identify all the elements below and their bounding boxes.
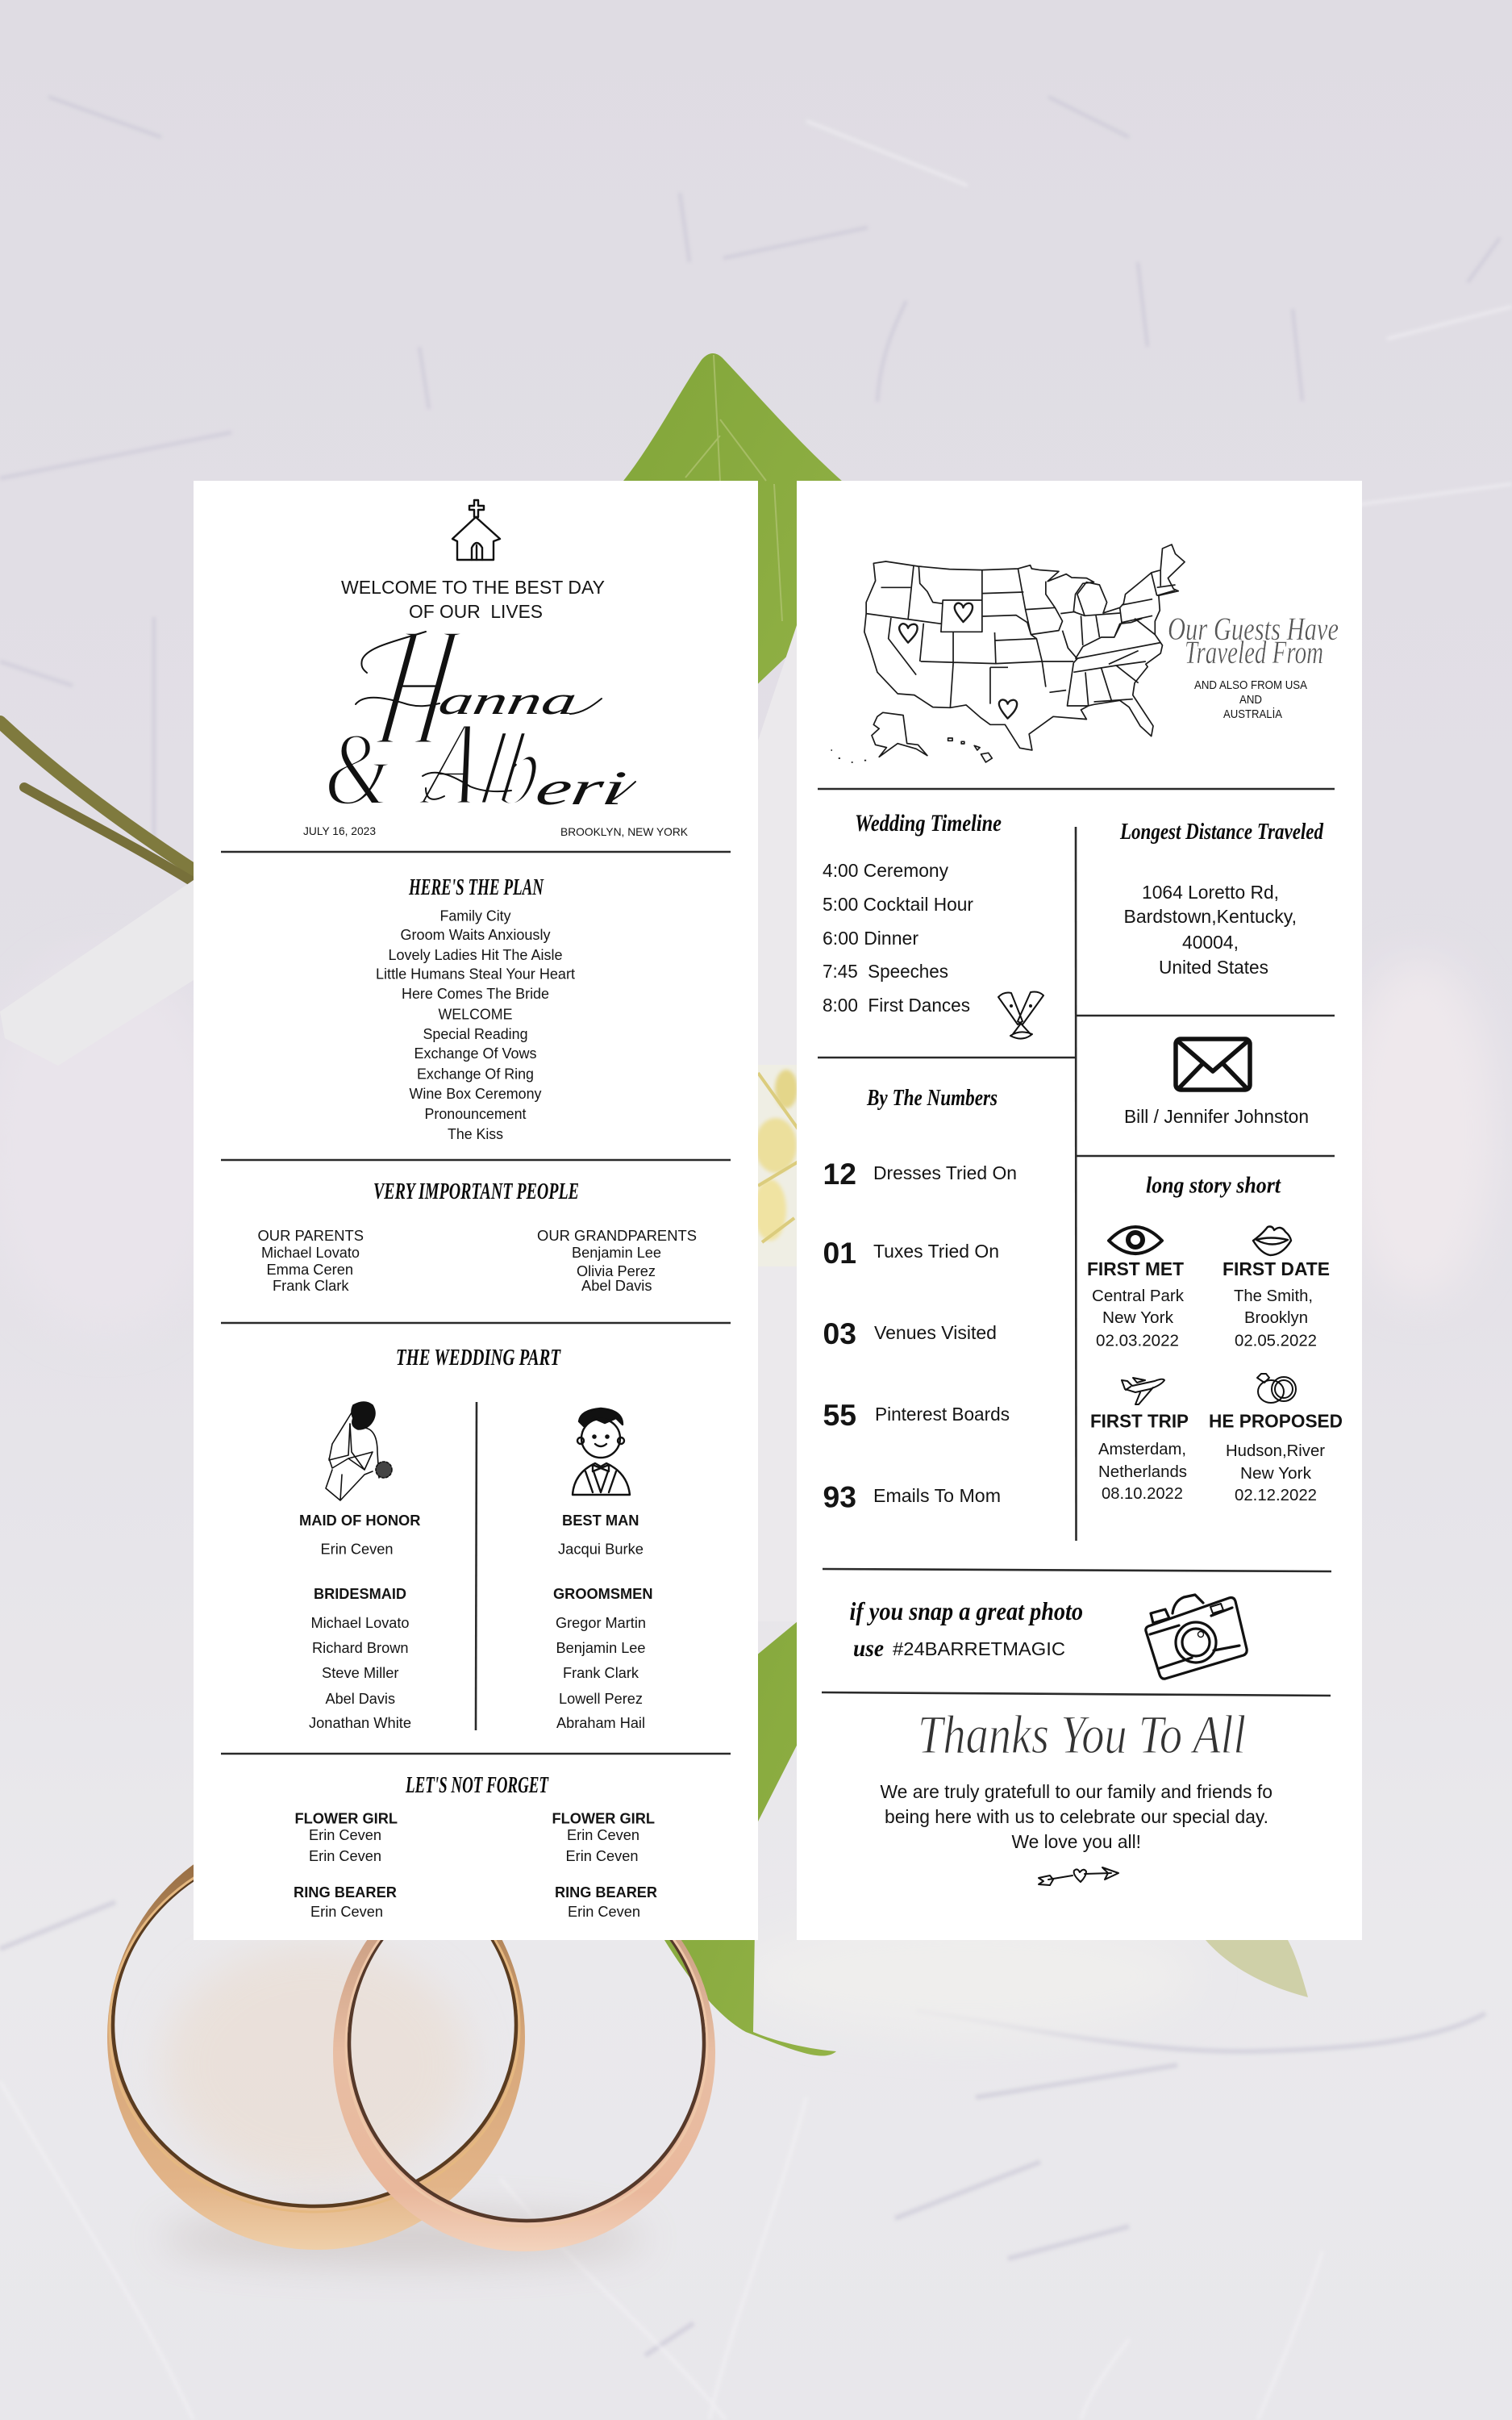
ring bearer right: Erin Ceven bbox=[568, 1904, 640, 1920]
welcome text: OF OUR LIVES bbox=[409, 601, 543, 622]
pale petal left bbox=[0, 960, 226, 1331]
couple names: lb bbox=[473, 711, 550, 828]
our parents: Frank Clark bbox=[273, 1278, 350, 1294]
stems bbox=[0, 722, 202, 887]
icon: champagne glasses bbox=[998, 992, 1043, 1039]
icon: envelope bbox=[1176, 1039, 1250, 1090]
first date: FIRST DATE bbox=[1223, 1258, 1330, 1279]
maid of honor bbox=[299, 1512, 421, 1557]
ring: left gold bbox=[107, 1824, 525, 2250]
first trip: 08.10.2022 bbox=[1102, 1485, 1183, 1503]
best man bbox=[558, 1512, 644, 1557]
flower girl left: Erin Ceven bbox=[309, 1848, 381, 1864]
maid of honor: MAID OF HONOR bbox=[299, 1512, 421, 1529]
stat: tuxes bbox=[823, 1237, 999, 1270]
first met: 02.03.2022 bbox=[1096, 1333, 1179, 1350]
best man: Jacqui Burke bbox=[558, 1541, 644, 1557]
he proposed: New York bbox=[1240, 1465, 1312, 1483]
first met: FIRST MET bbox=[1087, 1258, 1184, 1279]
ceremony order list bbox=[376, 908, 575, 1142]
best man: BEST MAN bbox=[562, 1512, 639, 1529]
stat: dresses bbox=[823, 1158, 1017, 1191]
ceremony order list: Family City bbox=[440, 908, 511, 924]
first date: 02.05.2022 bbox=[1235, 1333, 1317, 1350]
flower girl right: Erin Ceven bbox=[566, 1848, 639, 1864]
ring shadows bbox=[161, 2214, 645, 2263]
our grandparents: Abel Davis bbox=[581, 1278, 652, 1294]
he proposed: HE PROPOSED bbox=[1209, 1410, 1343, 1431]
heading: wedding timeline: Wedding Timeline bbox=[855, 810, 1002, 837]
ring bearer left: RING BEARER bbox=[294, 1884, 397, 1901]
heading: by the numbers: By The Numbers bbox=[866, 1086, 998, 1111]
our grandparents: OUR GRANDPARENTS bbox=[537, 1228, 697, 1244]
icon: heart arrow bbox=[1039, 1867, 1118, 1885]
stat: emails: Emails To Mom bbox=[873, 1485, 1001, 1506]
stat: pinterest: 55 bbox=[823, 1399, 856, 1432]
ceremony order list: Here Comes The Bride bbox=[402, 986, 549, 1002]
stat: emails bbox=[823, 1481, 1001, 1513]
welcome text: WELCOME TO THE BEST DAY bbox=[341, 577, 605, 598]
our parents bbox=[258, 1228, 364, 1294]
timeline list: 6:00 Dinner bbox=[823, 928, 918, 949]
stat: tuxes: Tuxes Tried On bbox=[873, 1241, 999, 1262]
groomsmen: Gregor Martin bbox=[556, 1615, 646, 1631]
flower girl left: FLOWER GIRL bbox=[295, 1810, 398, 1826]
icon: groom bbox=[573, 1408, 630, 1495]
flower stamens bbox=[754, 1065, 798, 1266]
icon: airplane bbox=[1122, 1378, 1164, 1404]
bridesmaids: Michael Lovato bbox=[311, 1615, 410, 1631]
couple names: H bbox=[366, 590, 469, 782]
groomsmen: GROOMSMEN bbox=[553, 1586, 653, 1602]
panel: right wedding details bbox=[797, 481, 1362, 1940]
also from text: AND bbox=[1239, 693, 1262, 707]
flower girl right bbox=[552, 1810, 655, 1864]
address: 1064 Loretto Rd, bbox=[1142, 882, 1279, 903]
ceremony order list: WELCOME bbox=[439, 1007, 513, 1023]
ribbon bbox=[0, 880, 194, 1066]
groomsmen: Abraham Hail bbox=[556, 1715, 645, 1731]
timeline list: 8:00 First Dances bbox=[823, 995, 970, 1016]
thank you message: We are truly gratefull to our family and friends fo bbox=[881, 1781, 1272, 1802]
couple names: A bbox=[416, 697, 492, 831]
ceremony order list: Little Humans Steal Your Heart bbox=[376, 966, 575, 983]
heading: here's the plan: HERE'S THE PLAN bbox=[408, 875, 544, 900]
address: United States bbox=[1159, 957, 1268, 978]
bridesmaids: Steve Miller bbox=[322, 1665, 398, 1681]
couple names bbox=[324, 590, 641, 831]
heading: longest distance traveled: Longest Distance Traveled bbox=[1119, 819, 1323, 845]
bridesmaids: Abel Davis bbox=[326, 1691, 395, 1707]
ceremony order list: Wine Box Ceremony bbox=[410, 1086, 542, 1102]
ceremony order list: Exchange Of Ring bbox=[417, 1066, 534, 1083]
ring bearer left: Erin Ceven bbox=[310, 1904, 383, 1920]
stat: dresses: 12 bbox=[823, 1158, 856, 1191]
icon: camera bbox=[1146, 1595, 1247, 1679]
ceremony order list: Special Reading bbox=[423, 1026, 527, 1042]
our grandparents bbox=[537, 1228, 697, 1294]
he proposed bbox=[1209, 1410, 1343, 1504]
photo hashtag text: #24BARRETMAGIC bbox=[893, 1638, 1065, 1659]
timeline list: 7:45 Speeches bbox=[823, 961, 948, 982]
also from text: AUSTRALİA bbox=[1223, 707, 1282, 721]
lower leaf bbox=[657, 1617, 836, 2056]
date and place: JULY 16, 2023 bbox=[303, 824, 376, 837]
groomsmen: Lowell Perez bbox=[559, 1691, 643, 1707]
script: our guests have traveled from bbox=[1168, 611, 1339, 670]
map: USA with hearts bbox=[831, 544, 1185, 762]
welcome text bbox=[341, 577, 605, 622]
ring bearer right bbox=[555, 1884, 657, 1920]
stat: tuxes: 01 bbox=[823, 1237, 856, 1270]
date and place: BROOKLYN, NEW YORK bbox=[560, 825, 689, 838]
our grandparents: Olivia Perez bbox=[577, 1263, 656, 1279]
first date bbox=[1223, 1258, 1330, 1350]
script: our guests have traveled from: Traveled From bbox=[1185, 634, 1323, 670]
bridesmaids: Jonathan White bbox=[309, 1715, 411, 1731]
first met: Central Park bbox=[1092, 1287, 1185, 1305]
first met: New York bbox=[1102, 1309, 1174, 1327]
first date: The Smith, bbox=[1234, 1287, 1313, 1305]
flower girl right: Erin Ceven bbox=[567, 1827, 639, 1843]
groomsmen: Frank Clark bbox=[563, 1665, 639, 1681]
stat: dresses: Dresses Tried On bbox=[873, 1162, 1017, 1183]
photo hashtag text bbox=[850, 1596, 1083, 1662]
flower girl left: Erin Ceven bbox=[309, 1827, 381, 1843]
flower girl left bbox=[295, 1810, 398, 1864]
timeline list: 5:00 Cocktail Hour bbox=[823, 894, 973, 915]
couple names: eri bbox=[532, 761, 630, 816]
ceremony order list: Pronouncement bbox=[424, 1106, 526, 1122]
ring bearer left bbox=[294, 1884, 397, 1920]
our parents: OUR PARENTS bbox=[258, 1228, 364, 1244]
ceremony order list: Groom Waits Anxiously bbox=[400, 927, 550, 943]
bud bbox=[1206, 1940, 1308, 1997]
stat: venues bbox=[823, 1317, 997, 1350]
name flourishes bbox=[356, 632, 635, 803]
photo hashtag text: if you snap a great photo bbox=[850, 1596, 1083, 1625]
our parents: Michael Lovato bbox=[261, 1245, 360, 1261]
first trip: Netherlands bbox=[1098, 1463, 1187, 1481]
top leaf bbox=[621, 353, 855, 807]
mail name: Bill / Jennifer Johnston bbox=[1124, 1106, 1309, 1127]
heading: let's not forget: LET'S NOT FORGET bbox=[405, 1773, 549, 1798]
ring: right rose bbox=[333, 1855, 715, 2251]
also from text: AND ALSO FROM USA bbox=[1194, 678, 1307, 692]
flower girl right: FLOWER GIRL bbox=[552, 1810, 655, 1826]
photo hashtag text: use bbox=[853, 1635, 884, 1662]
icon: lips bbox=[1253, 1226, 1291, 1255]
heading: long story short: long story short bbox=[1146, 1173, 1281, 1199]
address: 40004, bbox=[1182, 932, 1239, 953]
thank you message bbox=[881, 1781, 1272, 1852]
stat: pinterest bbox=[823, 1399, 1010, 1432]
ceremony order list: Lovely Ladies Hit The Aisle bbox=[389, 947, 563, 963]
address: Bardstown,Kentucky, bbox=[1124, 906, 1297, 927]
bridesmaids bbox=[309, 1586, 411, 1731]
script: our guests have traveled from: Our Guests Have bbox=[1168, 611, 1339, 647]
bridesmaids: Richard Brown bbox=[312, 1640, 408, 1656]
groomsmen bbox=[553, 1586, 653, 1731]
couple names: anna bbox=[435, 678, 581, 723]
first trip: FIRST TRIP bbox=[1090, 1410, 1189, 1431]
icon: church bbox=[452, 500, 500, 560]
first date: Brooklyn bbox=[1244, 1309, 1308, 1327]
ceremony order list: The Kiss bbox=[448, 1126, 503, 1142]
thank you message: We love you all! bbox=[1011, 1831, 1141, 1852]
bridesmaids: BRIDESMAID bbox=[314, 1586, 406, 1602]
ring bearer right: RING BEARER bbox=[555, 1884, 657, 1901]
address bbox=[1124, 882, 1297, 978]
white flower petals bbox=[750, 621, 806, 1621]
our parents: Emma Ceren bbox=[266, 1262, 353, 1278]
also from text bbox=[1194, 678, 1307, 721]
icon: bride bbox=[326, 1402, 392, 1500]
icon: eye bbox=[1109, 1227, 1162, 1254]
heading: very important people: VERY IMPORTANT PEOPLE bbox=[373, 1179, 579, 1204]
date and place bbox=[303, 824, 689, 838]
script: thanks you to all: Thanks You To All bbox=[918, 1704, 1246, 1765]
icon: linked rings bbox=[1257, 1374, 1296, 1403]
stat: emails: 93 bbox=[823, 1481, 856, 1513]
first trip: Amsterdam, bbox=[1098, 1441, 1186, 1458]
stat: venues: 03 bbox=[823, 1317, 856, 1350]
he proposed: 02.12.2022 bbox=[1235, 1487, 1317, 1504]
couple names: & bbox=[324, 711, 391, 828]
he proposed: Hudson,River bbox=[1226, 1442, 1325, 1460]
maid of honor: Erin Ceven bbox=[321, 1541, 394, 1557]
first met bbox=[1087, 1258, 1185, 1350]
timeline list: 4:00 Ceremony bbox=[823, 860, 948, 881]
panel: left wedding program bbox=[194, 481, 758, 1940]
first trip bbox=[1090, 1410, 1189, 1503]
ceremony order list: Exchange Of Vows bbox=[414, 1045, 537, 1062]
heading: the wedding part: THE WEDDING PART bbox=[396, 1346, 561, 1371]
timeline list bbox=[823, 860, 973, 1016]
stat: venues: Venues Visited bbox=[874, 1322, 997, 1343]
stat: pinterest: Pinterest Boards bbox=[875, 1404, 1010, 1425]
groomsmen: Benjamin Lee bbox=[556, 1640, 645, 1656]
thank you message: being here with us to celebrate our special day. bbox=[885, 1806, 1268, 1827]
our grandparents: Benjamin Lee bbox=[572, 1245, 661, 1261]
